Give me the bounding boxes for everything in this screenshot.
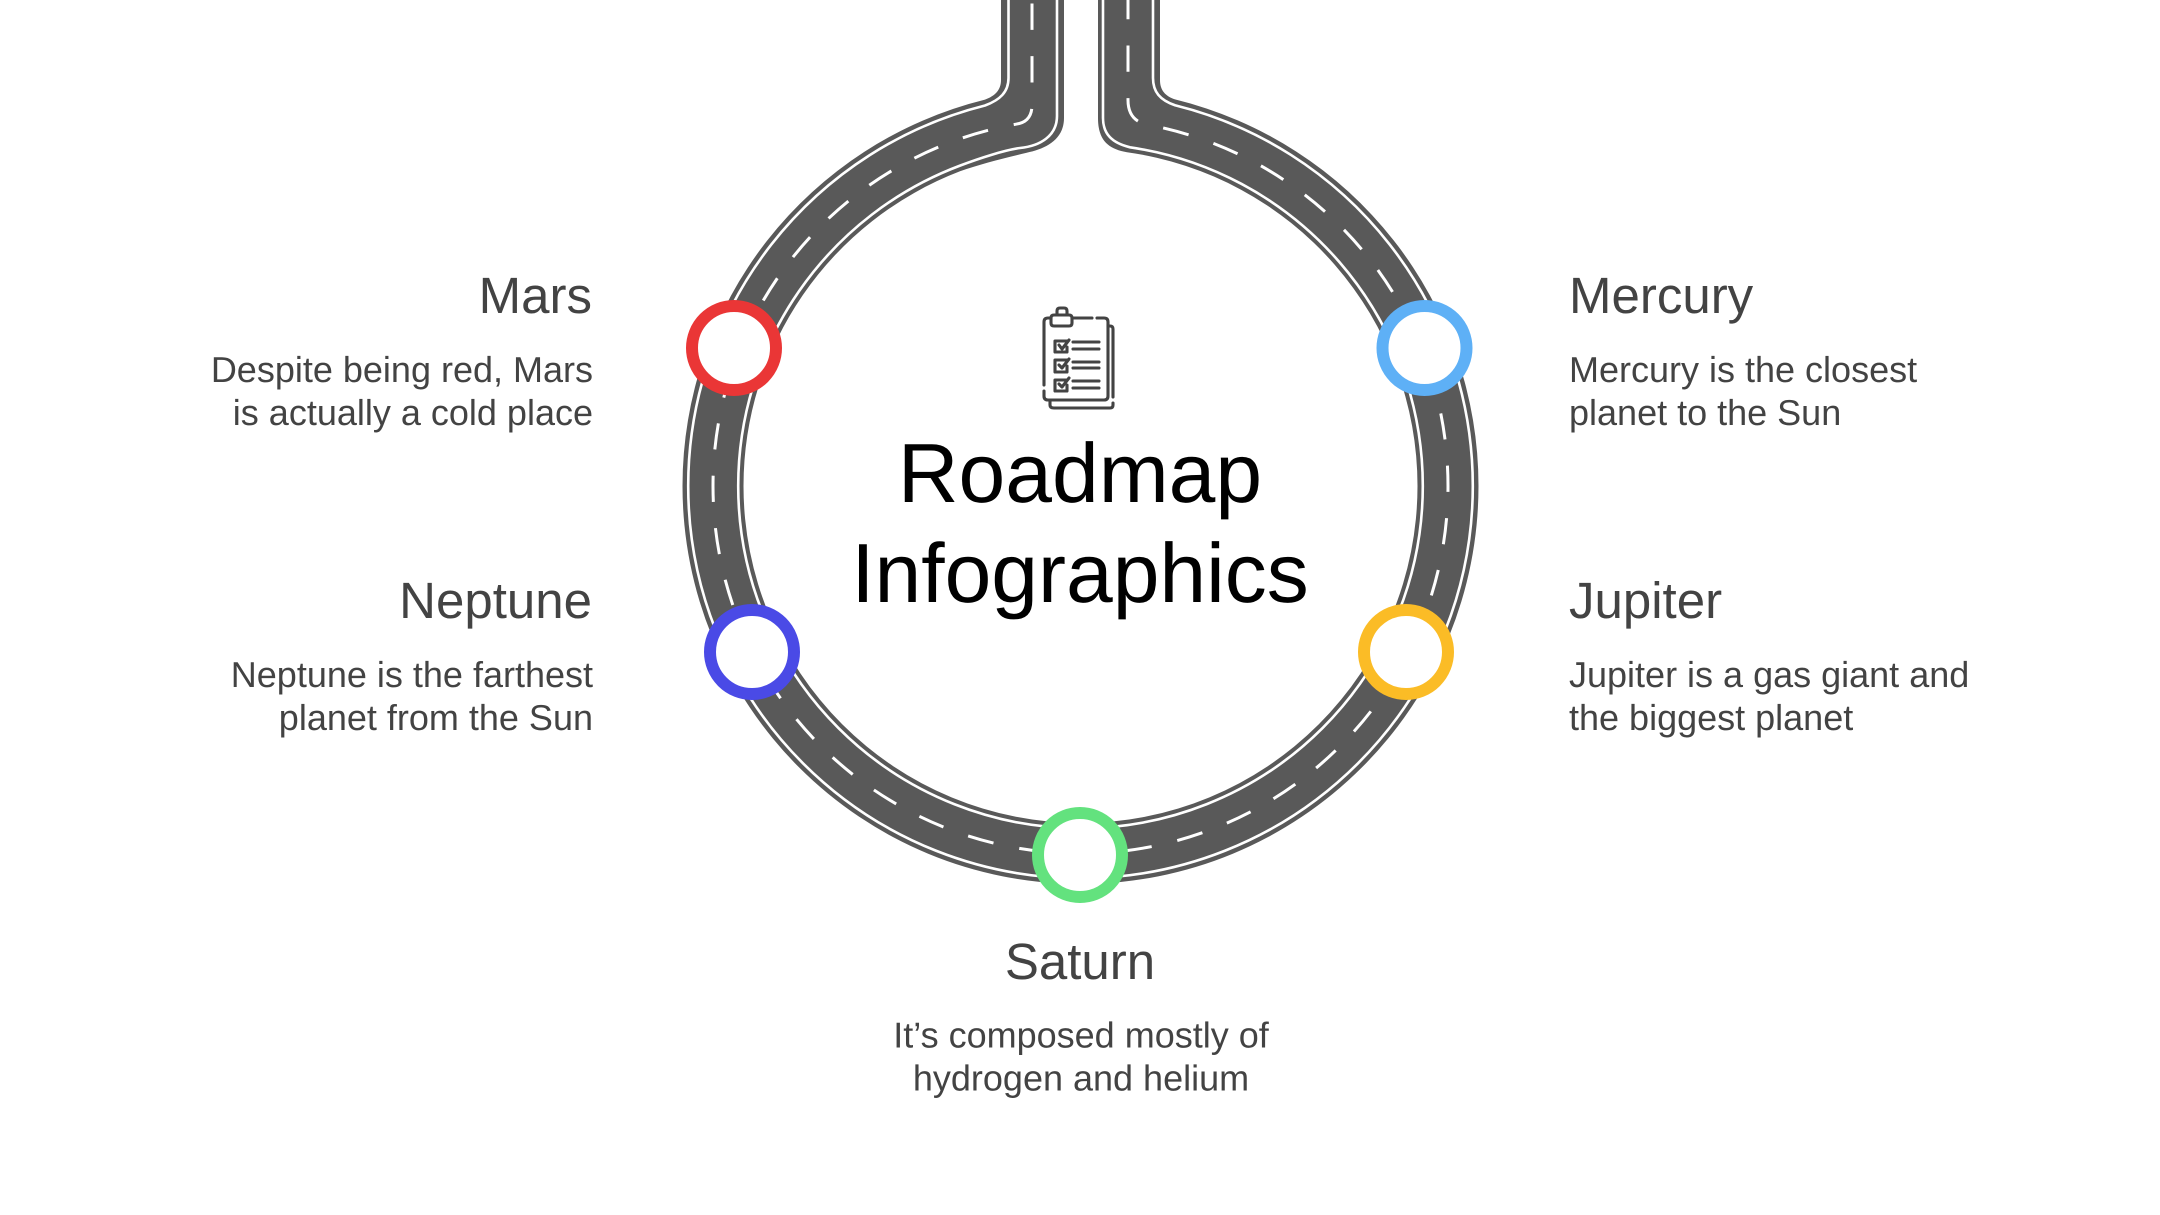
text block: Mars: Despite being red, Mars (211, 349, 593, 390)
text block: Jupiter: Jupiter (1569, 572, 1722, 629)
text block: Neptune: Neptune (399, 572, 592, 629)
text block: Neptune: Neptune is the farthest (231, 654, 593, 695)
text block: Saturn: It’s composed mostly of (893, 1014, 1270, 1056)
text block: Mars (211, 267, 593, 433)
marker: Mercury (1382, 306, 1466, 390)
title: Roadmap (898, 426, 1262, 520)
title (851, 426, 1309, 620)
text block: Neptune: planet from the Sun (279, 697, 593, 738)
text block: Jupiter (1569, 572, 1969, 738)
title: Infographics (851, 526, 1309, 620)
text block: Saturn (893, 933, 1270, 1098)
text block: Mercury: Mercury (1569, 267, 1754, 324)
text block: Jupiter: Jupiter is a gas giant and (1569, 654, 1969, 695)
text block: Mercury: Mercury is the closest (1569, 349, 1917, 390)
text block: Mars: is actually a cold place (233, 392, 593, 433)
marker: Saturn (1038, 813, 1122, 897)
marker: Jupiter (1364, 610, 1448, 694)
road: circular track with two entry lanes (682, 0, 1479, 884)
marker: Neptune (710, 610, 794, 694)
text block: Saturn: hydrogen and helium (913, 1058, 1249, 1098)
text block: Neptune (231, 572, 593, 738)
text block: Mercury (1569, 267, 1917, 433)
marker: Mars (692, 306, 776, 390)
text block: Mercury: planet to the Sun (1569, 392, 1841, 433)
text block: Jupiter: the biggest planet (1569, 697, 1853, 738)
icon: clipboard checklist (1044, 308, 1113, 408)
text block: Mars: Mars (479, 267, 592, 324)
text block: Saturn: Saturn (1005, 933, 1155, 990)
